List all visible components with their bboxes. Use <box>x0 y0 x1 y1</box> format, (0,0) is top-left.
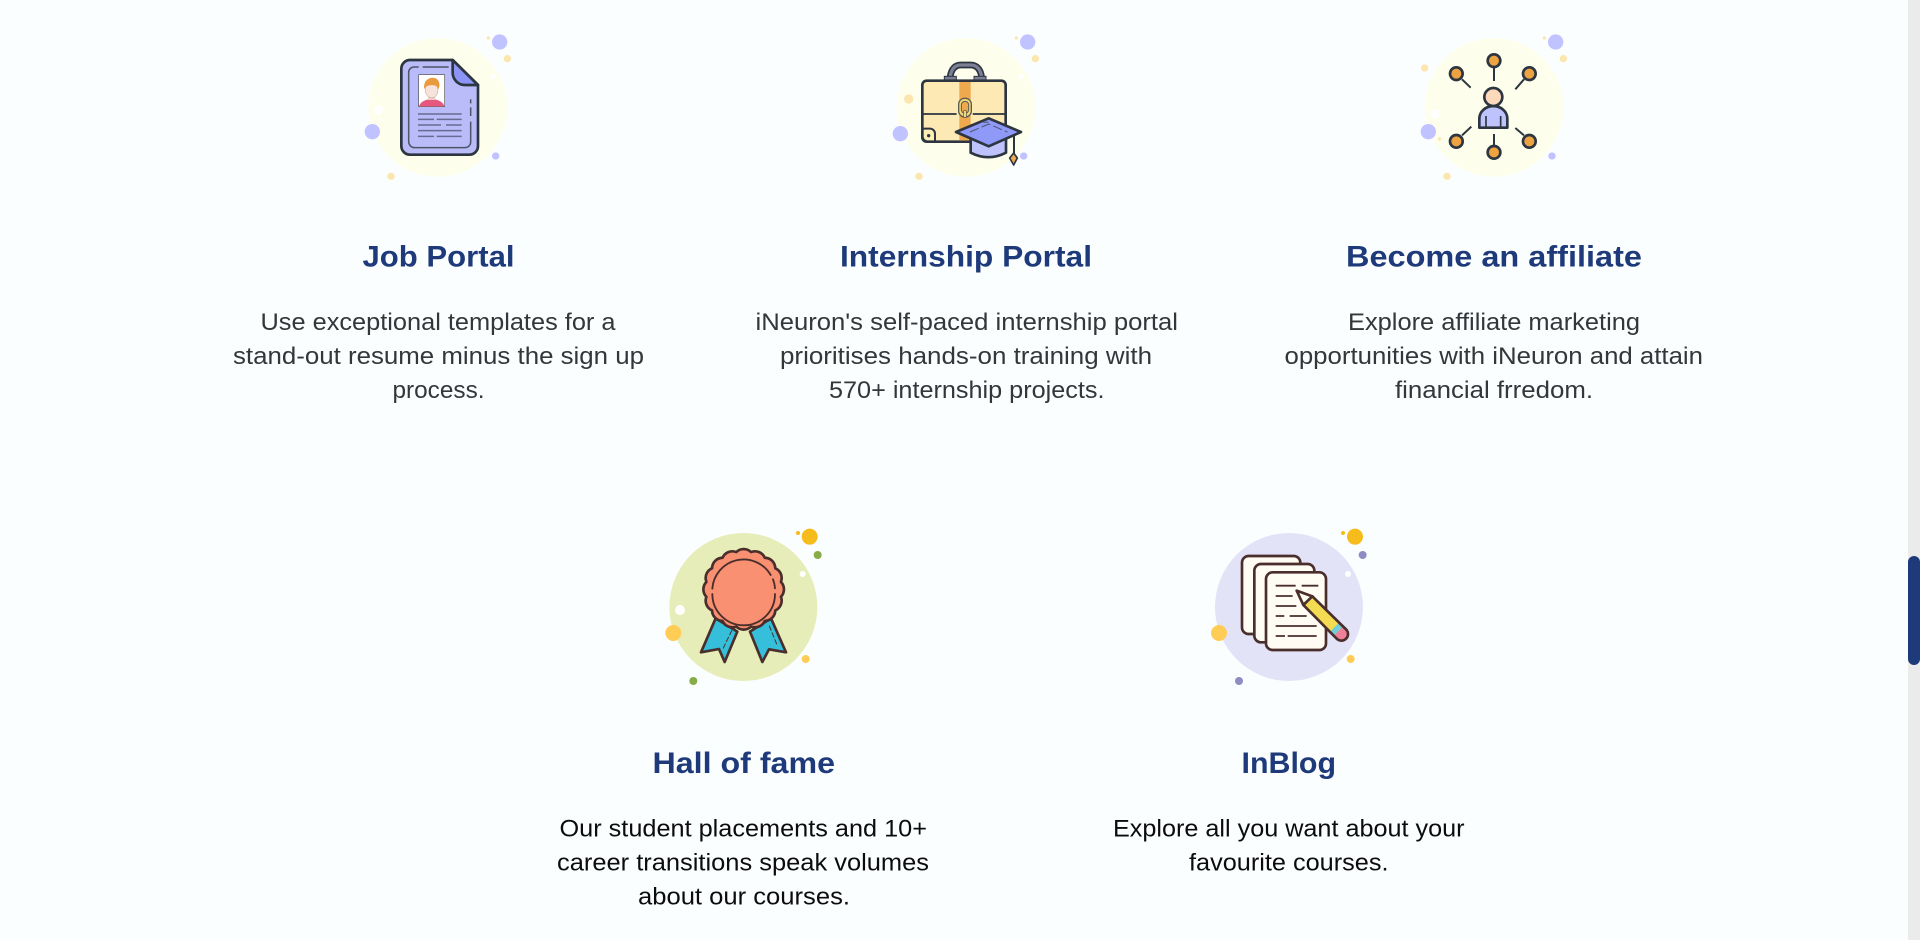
text: Become an affiliate description: opportunities with iNeuron and attain <box>1284 343 1703 370</box>
text: Hall of fame description: career transitions speak volumes <box>557 850 929 876</box>
text: Job Portal description: Use exceptional templates for a <box>260 309 616 336</box>
text: InBlog description: Explore all you want about your <box>1113 816 1464 842</box>
icon: person network <box>1421 34 1567 180</box>
icon: resume document <box>365 34 511 180</box>
text: Hall of fame description: Our student placements and 10+ <box>560 816 927 842</box>
icon: papers and pencil <box>1211 529 1367 685</box>
scrollbar <box>1908 0 1920 940</box>
text: Job Portal description: process. <box>392 377 484 404</box>
heading: Internship Portal: Internship Portal <box>840 240 1092 274</box>
panel: Job Portal <box>233 34 644 404</box>
text: Hall of fame description: about our courses. <box>638 884 850 910</box>
panel: Become an affiliate <box>1284 34 1703 404</box>
panel: InBlog <box>1113 529 1464 876</box>
text: InBlog description: favourite courses. <box>1189 850 1388 876</box>
text: Become an affiliate description: financial frredom. <box>1395 377 1593 404</box>
panel: Hall of fame <box>557 529 929 910</box>
heading: Job Portal: Job Portal <box>362 240 514 274</box>
icon: briefcase and graduation cap <box>893 34 1039 180</box>
text: Become an affiliate description: Explore affiliate marketing <box>1348 309 1640 336</box>
text: Internship Portal description <box>756 309 1178 404</box>
heading: Become an affiliate: Become an affiliate <box>1346 240 1642 274</box>
text: Internship Portal description: iNeuron's self-paced internship portal <box>756 309 1178 336</box>
text: Become an affiliate description <box>1284 309 1703 404</box>
heading: InBlog: InBlog <box>1242 747 1336 780</box>
text: Hall of fame description <box>557 816 929 910</box>
text: Internship Portal description: prioritises hands-on training with <box>780 343 1152 370</box>
text: Job Portal description: stand-out resume minus the sign up <box>233 343 644 370</box>
text: InBlog description <box>1113 816 1464 876</box>
icon: award rosette <box>665 529 822 685</box>
text: Internship Portal description: 570+ internship projects. <box>829 377 1104 404</box>
text: Job Portal description <box>233 309 644 404</box>
panel: Internship Portal <box>756 34 1178 404</box>
heading: Hall of fame: Hall of fame <box>652 747 835 780</box>
